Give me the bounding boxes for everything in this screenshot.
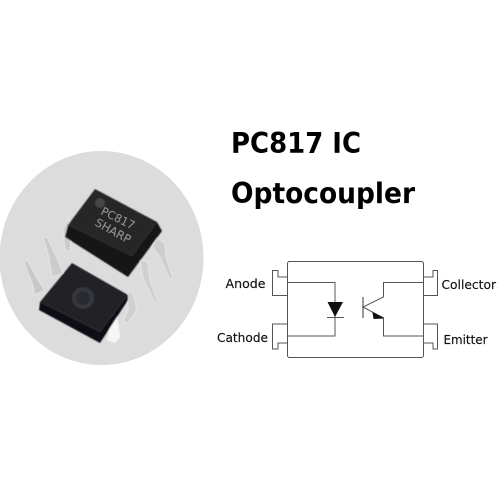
pin: emitter [424,324,438,349]
pin: collector [424,270,438,296]
circuit diagram [272,262,438,358]
icon: upper chip top face [68,189,157,256]
package outline [288,262,424,358]
icon: lower chip side face [39,295,128,343]
photo: lower chip [24,237,137,343]
label: Anode: Anode [226,276,266,291]
icon: circular ejector mark [72,287,94,309]
title line two: Optocoupler [231,177,415,210]
chip marking: SHARP: SHARP [93,215,133,247]
icon: LED triangle [328,302,343,317]
pin labels [217,276,497,347]
icon: upper chip side face [65,222,162,277]
title [231,127,415,210]
photo background ellipse [0,151,204,365]
label: Emitter: Emitter [444,332,488,347]
title line one: PC817 IC [231,127,361,160]
icon: lower chip pins [24,237,137,343]
label: Cathode: Cathode [217,330,268,345]
LED cathode bar [327,316,344,318]
chip marking: PC817: PC817 [99,204,137,232]
pin: cathode [272,324,288,349]
transistor wiring [363,282,424,336]
photo: upper PC817 chip [63,189,173,302]
label: Collector: Collector [442,277,497,292]
icon: upper chip pins [63,218,173,302]
pin: anode [272,270,288,296]
icon: pin-one dot [95,198,105,208]
icon: lower chip top face [40,263,128,332]
icon: emitter arrow [373,313,384,318]
LED wiring [288,282,335,336]
transistor base bar [362,297,364,318]
